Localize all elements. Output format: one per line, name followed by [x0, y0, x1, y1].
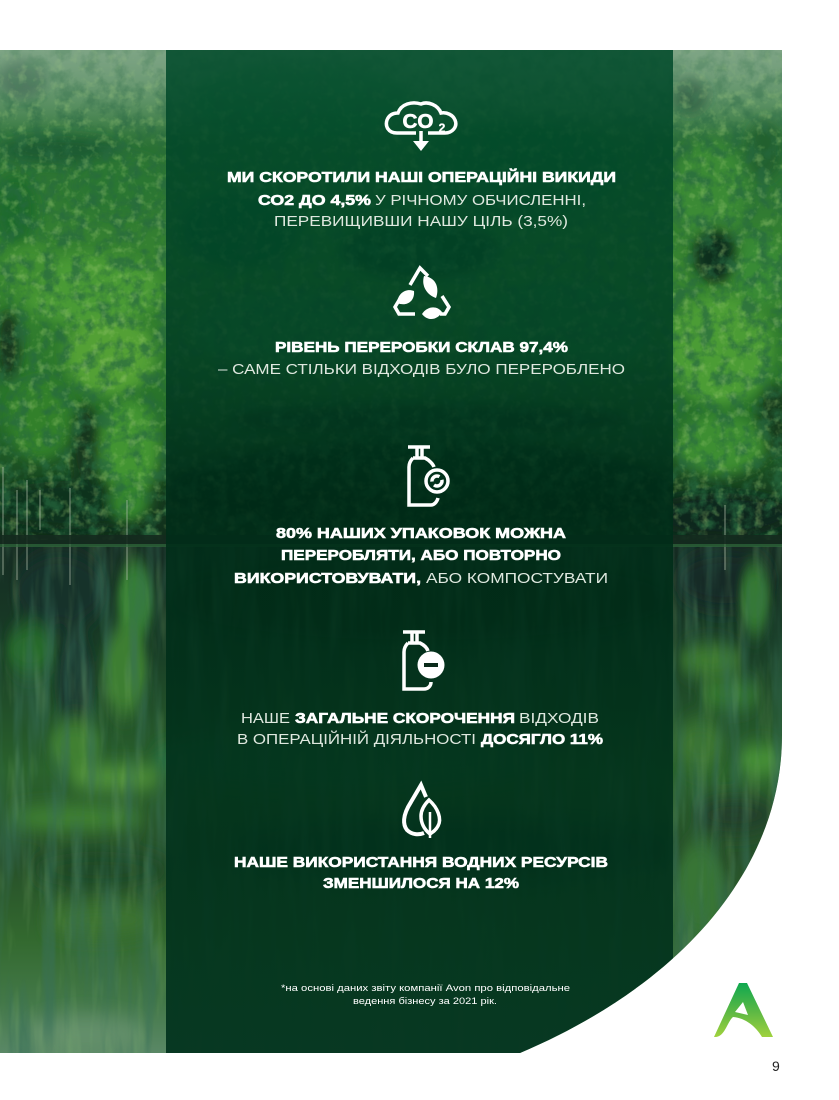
text: recycling rate: РІВЕНЬ ПЕРЕРОБКИ СКЛАВ 97,4% [275, 339, 568, 356]
text: waste reduction: ЗАГАЛЬНЕ СКОРОЧЕННЯ [295, 710, 515, 727]
text: water use: НАШЕ ВИКОРИСТАННЯ ВОДНИХ РЕСУРСІВ [234, 854, 608, 871]
text: packaging: ВИКОРИСТОВУВАТИ, [234, 570, 421, 587]
logo: green A [714, 983, 773, 1037]
text: packaging [234, 525, 608, 587]
text: water use: ЗМЕНШИЛОСЯ НА 12% [323, 875, 519, 892]
text: waste reduction: В ОПЕРАЦІЙНІЙ ДІЯЛЬНОСТІ [237, 730, 476, 748]
icon: water drop with leaf [404, 785, 440, 838]
footnote: ведення бізнесу за 2021 рік. [353, 996, 497, 1007]
icon: CO2 cloud: 2 [439, 121, 446, 135]
page number: 9 [772, 1058, 780, 1074]
panel: dark green overlay [166, 50, 673, 1053]
text: waste reduction [237, 710, 603, 748]
text: packaging: АБО КОМПОСТУВАТИ [426, 570, 608, 587]
text: waste reduction: ВІДХОДІВ [519, 710, 599, 727]
text: waste reduction: НАШЕ [241, 710, 290, 727]
icon: CO2 cloud [386, 103, 456, 151]
tree trunks [3, 467, 725, 585]
icon: bottle with recycle sign [408, 447, 448, 505]
shoreline [0, 535, 782, 544]
text: CO2 emissions: ПЕРЕВИЩИВШИ НАШУ ЦІЛЬ (3,5%) [274, 213, 568, 230]
text: recycling rate [218, 339, 625, 378]
text: water use [234, 854, 608, 892]
text: packaging: ПЕРЕРОБЛЯТИ, АБО ПОВТОРНО [281, 547, 561, 564]
text: recycling rate: – САМЕ СТІЛЬКИ ВІДХОДІВ БУЛО ПЕРЕРОБЛЕНО [218, 361, 625, 378]
footnote: *на основі даних звіту компанії Avon про відповідальне [281, 983, 570, 994]
text: CO2 emissions: У РІЧНОМУ ОБЧИСЛЕННІ, [375, 192, 586, 209]
text: waste reduction: ДОСЯГЛО 11% [481, 731, 603, 748]
icon: bottle with minus sign [403, 632, 444, 689]
text: packaging: 80% НАШИХ УПАКОВОК МОЖНА [276, 525, 566, 542]
text: CO2 emissions [227, 168, 616, 230]
text: CO2 emissions: СО2 ДО 4,5% [258, 192, 371, 209]
icon: CO2 cloud: CO [402, 111, 434, 133]
text: CO2 emissions: МИ СКОРОТИЛИ НАШІ ОПЕРАЦІЙНІ ВИКИДИ [227, 168, 616, 186]
lake streaks [0, 546, 782, 1053]
footnote [281, 983, 570, 1007]
icon: recycling triangle with leaves [395, 268, 449, 319]
